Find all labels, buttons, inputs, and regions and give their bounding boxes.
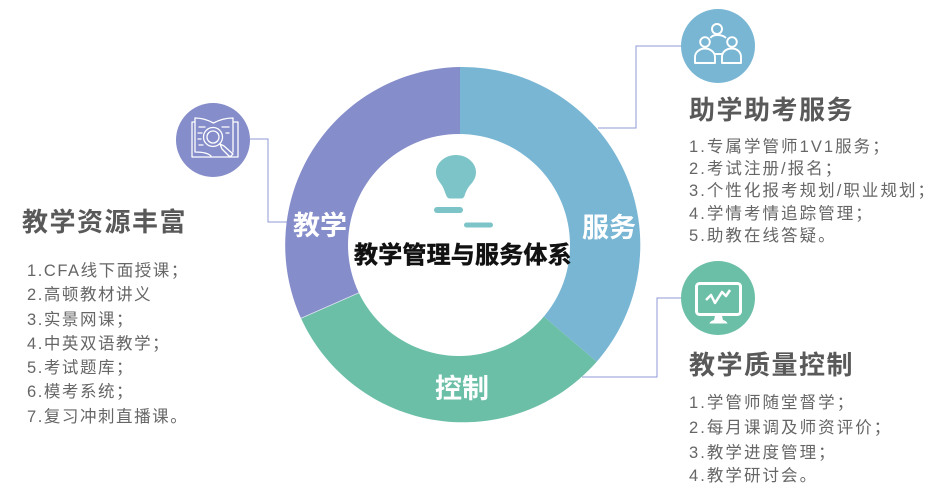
list: study support bbox=[689, 138, 936, 245]
list: teaching quality control bbox=[689, 394, 892, 485]
list: study support: 4.学情考情追踪管理； bbox=[689, 205, 874, 223]
donut segment: control bbox=[301, 245, 597, 422]
center title: 教学管理与服务体系 bbox=[354, 242, 572, 269]
donut inner circle bbox=[348, 134, 570, 356]
heading: study support: 助学助考服务 bbox=[689, 95, 854, 125]
list: teaching resources: 1.CFA线下面授课； bbox=[27, 262, 189, 280]
list: teaching resources: 6.模考系统； bbox=[27, 383, 134, 401]
divider between teaching and control bbox=[301, 293, 359, 318]
list: study support: 5.助教在线答疑。 bbox=[689, 227, 837, 245]
icon: light bulb bbox=[434, 155, 493, 228]
list: teaching resources: 4.中英双语教学； bbox=[27, 335, 170, 353]
heading: teaching quality control: 教学质量控制 bbox=[689, 350, 854, 380]
segment label: teaching: 教学 bbox=[293, 211, 347, 241]
list: teaching quality control: 4.教学研讨会。 bbox=[689, 467, 818, 485]
donut segment: service bbox=[460, 67, 640, 362]
list: teaching resources: 5.考试题库； bbox=[27, 359, 134, 377]
list: teaching resources: 2.高顿教材讲义 bbox=[27, 286, 152, 304]
segment label: service: 服务 bbox=[582, 213, 636, 243]
list: teaching quality control: 1.学管师随堂督学； bbox=[689, 394, 855, 412]
icon: monitor with chart bbox=[681, 261, 755, 335]
list: study support: 2.考试注册/报名； bbox=[689, 160, 843, 178]
icon: book and magnifier bbox=[176, 103, 250, 177]
connector: service icon to ring bbox=[598, 46, 681, 128]
list: study support: 3.个性化报考规划/职业规划； bbox=[689, 182, 936, 200]
icon: people group bbox=[681, 9, 755, 83]
connector: teaching icon to ring bbox=[250, 139, 290, 222]
list: study support: 1.专属学管师1V1服务； bbox=[689, 138, 891, 156]
donut segment: teaching bbox=[285, 67, 460, 318]
list: teaching resources bbox=[27, 262, 189, 426]
list: teaching quality control: 2.每月课调及师资评价； bbox=[689, 419, 892, 437]
heading: teaching resources: 教学资源丰富 bbox=[22, 207, 187, 237]
list: teaching quality control: 3.教学进度管理； bbox=[689, 444, 837, 462]
list: teaching resources: 3.实景网课； bbox=[27, 311, 134, 329]
segment label: control: 控制 bbox=[435, 374, 489, 404]
connector: control icon to ring bbox=[582, 298, 681, 377]
list: teaching resources: 7.复习冲刺直播课。 bbox=[27, 408, 188, 426]
